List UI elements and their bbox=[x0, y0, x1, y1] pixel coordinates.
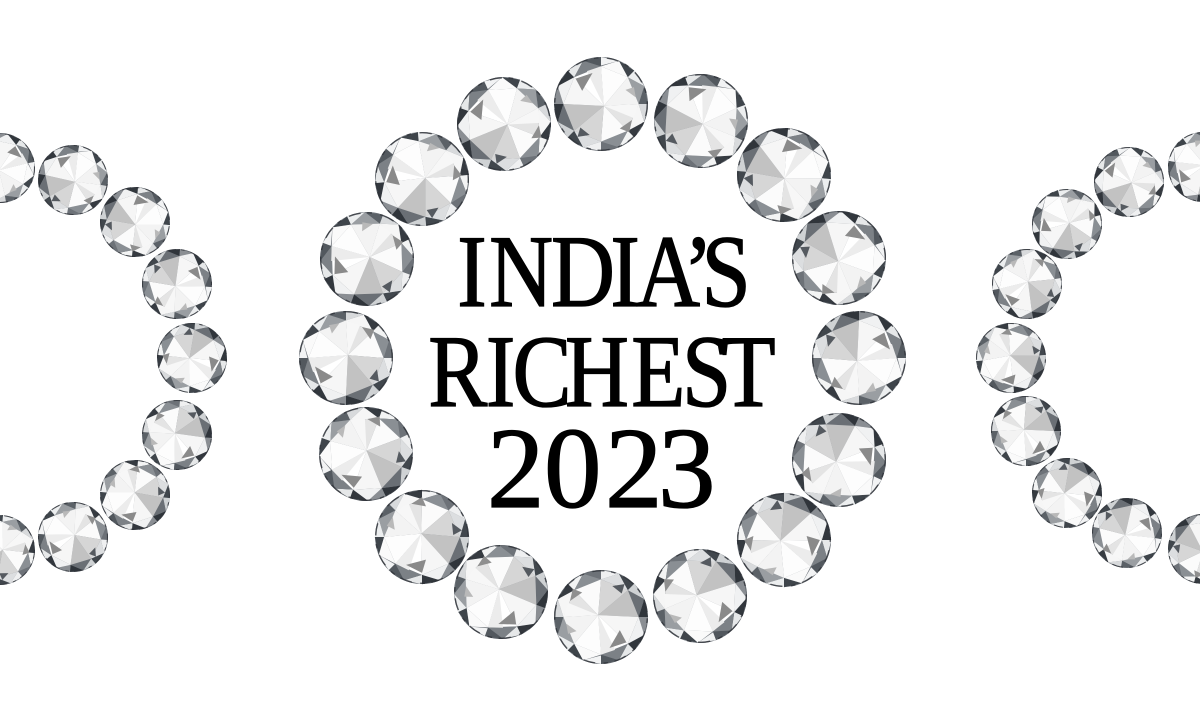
icon: diamond bbox=[356, 113, 488, 245]
right diamond ring bbox=[962, 126, 1200, 597]
icon: diamond bbox=[307, 199, 427, 319]
icon: diamond bbox=[779, 198, 899, 318]
icon: diamond bbox=[962, 309, 1060, 407]
central diamond ring bbox=[299, 57, 906, 664]
icon: diamond bbox=[1084, 137, 1174, 227]
icon: diamond bbox=[304, 392, 428, 516]
icon: diamond bbox=[640, 536, 760, 656]
icon: diamond bbox=[639, 59, 763, 183]
icon: diamond bbox=[991, 396, 1061, 466]
icon: diamond bbox=[777, 398, 901, 522]
icon: diamond bbox=[718, 474, 850, 606]
icon: diamond bbox=[441, 532, 561, 652]
icon: diamond bbox=[35, 499, 111, 575]
icon: diamond bbox=[1018, 444, 1116, 542]
icon: diamond bbox=[554, 570, 648, 664]
icon: diamond bbox=[0, 501, 49, 599]
icon: diamond bbox=[32, 139, 114, 221]
icon: diamond bbox=[86, 446, 184, 544]
icon: diamond bbox=[986, 243, 1068, 325]
title: 2023 bbox=[487, 405, 716, 532]
icon: diamond bbox=[1086, 492, 1168, 574]
icon: diamond bbox=[442, 62, 566, 186]
icon: diamond bbox=[86, 173, 184, 271]
icon: diamond bbox=[139, 246, 215, 322]
icon: diamond bbox=[554, 57, 648, 151]
left diamond ring bbox=[0, 127, 241, 599]
icon: diamond bbox=[718, 109, 850, 241]
title: RICHEST bbox=[428, 314, 776, 429]
icon: diamond bbox=[1155, 501, 1200, 597]
icon: diamond bbox=[299, 311, 393, 405]
icon: diamond bbox=[356, 471, 488, 603]
icon: diamond bbox=[1162, 126, 1200, 208]
icon: diamond bbox=[812, 311, 906, 405]
title: INDIA’S bbox=[457, 214, 751, 329]
icon: diamond bbox=[139, 397, 215, 473]
title bbox=[428, 214, 776, 532]
icon: diamond bbox=[0, 127, 41, 209]
icon: diamond bbox=[1019, 176, 1115, 272]
icon: diamond bbox=[143, 309, 241, 407]
